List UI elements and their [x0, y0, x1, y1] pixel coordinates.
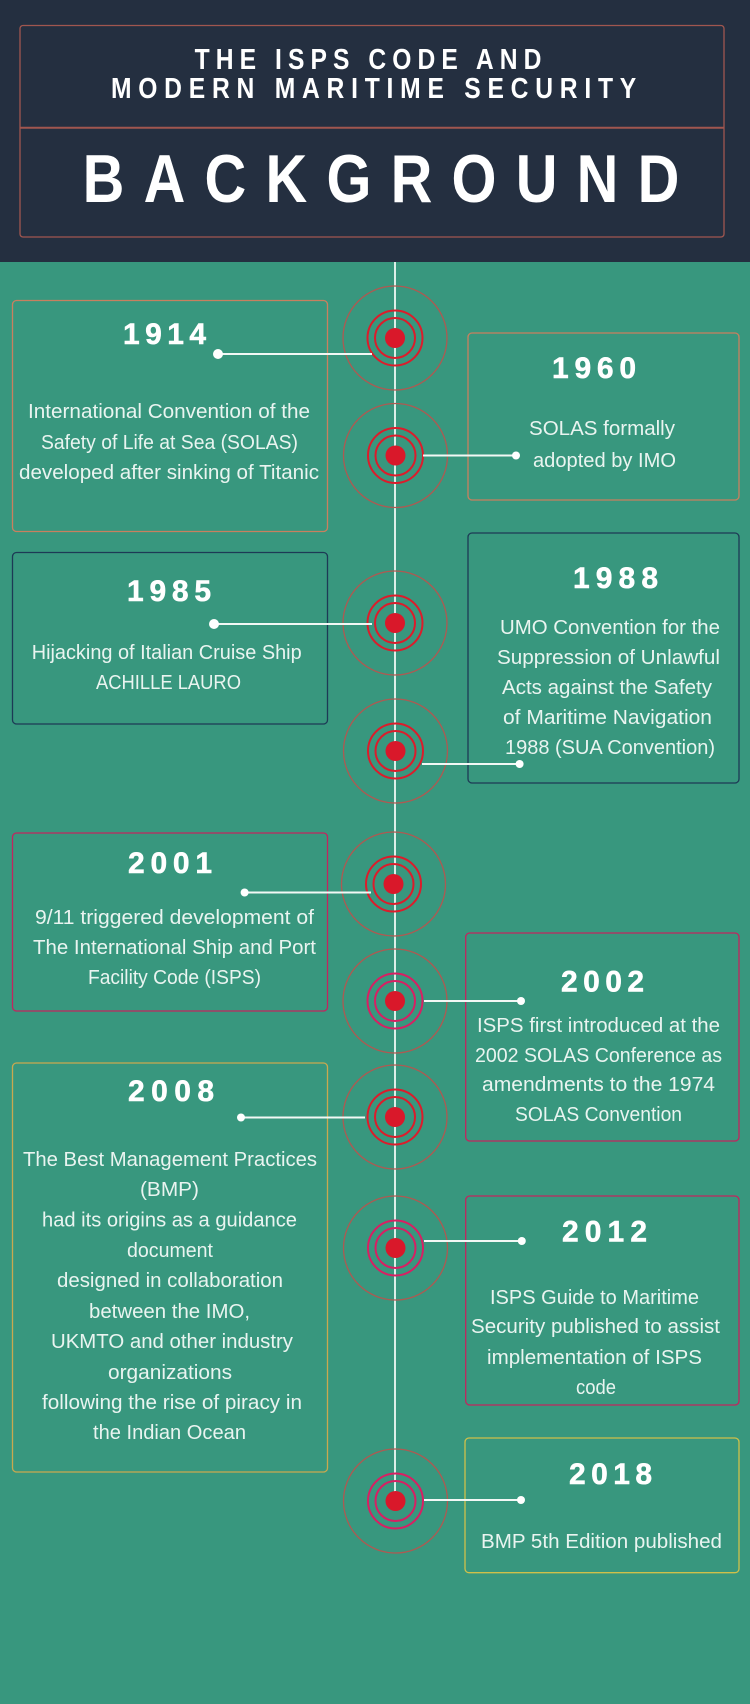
text: 2012 description: implementation of ISPS [487, 1347, 702, 1369]
panel: 2018 [465, 1438, 739, 1573]
text: 1988 description: Suppression of Unlawful [497, 647, 720, 669]
marker: 1985 [343, 571, 447, 675]
text: 2008 description [23, 1149, 317, 1444]
connector: 2002 [424, 997, 525, 1005]
text: 2001 description: The International Ship and Port [33, 937, 316, 959]
title: THE ISPS CODE AND [195, 43, 541, 75]
text: 2008 description: document [127, 1240, 213, 1262]
text: 1988 description: UMO Convention for the [500, 617, 720, 639]
text: 1985 description: Hijacking of Italian Cruise Ship [32, 642, 302, 664]
text: 1985 description [32, 642, 302, 694]
text: 1914 description: developed after sinking of Titanic [19, 462, 319, 484]
text: 1988 description: 1988 (SUA Convention) [505, 737, 715, 759]
panel: 1985 [12, 552, 328, 724]
title: MODERN MARITIME SECURITY [111, 72, 636, 104]
text: 2008 description: between the IMO, [89, 1301, 250, 1323]
header band [0, 0, 750, 262]
year 2002: 2002 [561, 966, 644, 999]
connector: 2008 [237, 1114, 365, 1122]
connector: 1960 [423, 452, 520, 460]
marker: 2012 [344, 1196, 448, 1300]
text: 1960 description: adopted by IMO [533, 450, 676, 472]
text: 1960 description [529, 418, 676, 472]
marker: 1960 [344, 404, 448, 508]
text: 2002 description: ISPS first introduced at the [477, 1015, 720, 1037]
marker: 2002 [343, 949, 447, 1053]
text: 2008 description: following the rise of piracy in [42, 1392, 302, 1414]
year 1988: 1988 [573, 562, 658, 595]
heading: background: BACKGROUND [83, 142, 679, 217]
year 2012: 2012 [562, 1216, 647, 1248]
text: 2008 description: the Indian Ocean [93, 1422, 246, 1444]
text: 2008 description: had its origins as a guidance [42, 1210, 297, 1232]
year 2018: 2018 [569, 1458, 652, 1491]
marker: 2008 [343, 1065, 447, 1169]
year 2008: 2008 [128, 1075, 214, 1108]
text: 2008 description: organizations [108, 1362, 232, 1384]
text: 2002 description: amendments to the 1974 [482, 1074, 715, 1096]
year 1914: 1914 [123, 318, 206, 351]
text: 2012 description: code [576, 1377, 616, 1399]
text: 1914 description: International Convention of the [28, 401, 310, 423]
connector: 2018 [424, 1496, 525, 1504]
connector: 1914 [213, 349, 372, 359]
text: 2002 description: SOLAS Convention [515, 1104, 682, 1126]
connector: 2001 [241, 888, 371, 896]
panel: 1988 [468, 533, 739, 783]
text: 2008 description: The Best Management Practices [23, 1149, 317, 1171]
text: 1988 description [497, 617, 720, 759]
text: 1988 description: of Maritime Navigation [503, 707, 712, 729]
text: 2008 description: UKMTO and other industry [51, 1331, 293, 1353]
marker: 1988 [344, 699, 448, 803]
text: 2001 description: 9/11 triggered development of [35, 907, 314, 929]
text: 2008 description: (BMP) [140, 1179, 199, 1201]
text: 2012 description: ISPS Guide to Maritime [490, 1287, 699, 1309]
panel: 2002 [466, 933, 739, 1141]
year 2001: 2001 [128, 847, 212, 880]
text: 2002 description [475, 1015, 722, 1126]
header frame [20, 26, 724, 237]
text: 2012 description [471, 1287, 720, 1399]
text: 1960 description: SOLAS formally [529, 418, 675, 440]
panel: 2012 [466, 1196, 739, 1405]
text: 2001 description: Facility Code (ISPS) [88, 967, 261, 989]
timeline axis [394, 262, 396, 1492]
marker: 1914 [343, 286, 447, 390]
text: 2008 description: designed in collaboration [57, 1270, 283, 1292]
panel: 2008 [12, 1063, 328, 1472]
marker: 2001 [342, 832, 446, 936]
panel: 1960 [468, 333, 739, 500]
connector: 1985 [209, 619, 372, 629]
year 1985: 1985 [127, 575, 211, 608]
marker: 2018 [344, 1449, 448, 1553]
text: 1914 description: Safety of Life at Sea (SOLAS) [41, 432, 298, 454]
text: 1914 description [19, 401, 319, 484]
text: 2018 description: BMP 5th Edition published [481, 1531, 722, 1553]
panel: 2001 [12, 833, 328, 1011]
connector: 2012 [424, 1237, 526, 1245]
text: 1988 description: Acts against the Safety [502, 677, 712, 699]
text: 2001 description [33, 907, 316, 989]
connector: 1988 [422, 760, 524, 768]
title [111, 43, 636, 104]
text: 2012 description: Security published to assist [471, 1316, 720, 1338]
panel: 1914 [12, 300, 328, 532]
year 1960: 1960 [552, 352, 636, 385]
text: 2002 description: 2002 SOLAS Conference as [475, 1045, 722, 1067]
text: 1985 description: ACHILLE LAURO [96, 672, 241, 694]
